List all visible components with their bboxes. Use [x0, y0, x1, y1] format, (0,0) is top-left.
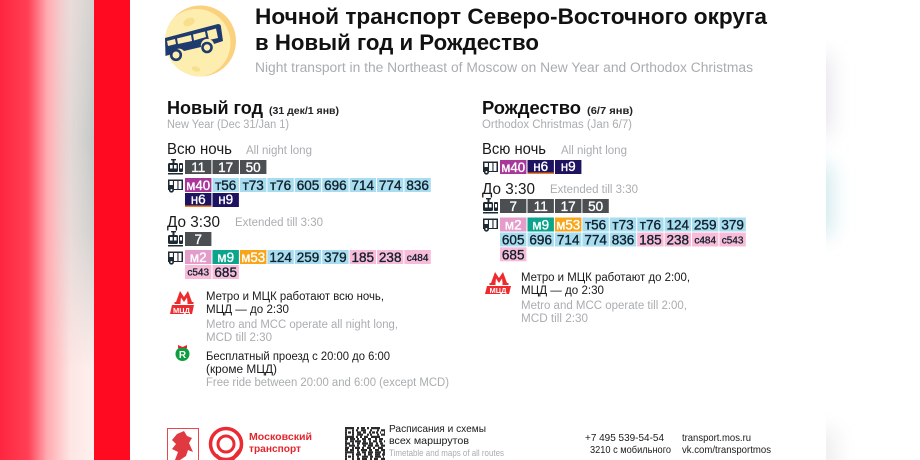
title: [255, 4, 768, 55]
bus routes all night: т76: [270, 178, 291, 193]
heading: till 3:30: До 3:30: [482, 181, 535, 198]
bus routes till 3:30: с543: [722, 236, 744, 246]
heading: all night: [167, 141, 312, 158]
bus routes all night: 696: [324, 178, 347, 193]
heading: all night: Всю ночь: [167, 141, 232, 158]
blurred left background: [0, 0, 94, 460]
heading: till 3:30: [482, 181, 638, 198]
bus routes till 3:30: м53: [241, 250, 265, 265]
bus routes all night: [500, 159, 581, 175]
icon: tram: [483, 198, 498, 214]
blurred right background: [780, 55, 835, 460]
bus routes all night: 774: [379, 178, 402, 193]
footer: Moscow transport name: [249, 431, 312, 455]
tram routes all night: 11: [191, 160, 205, 175]
footer: Moscow transport name: Московский: [249, 431, 312, 443]
tram routes till 3:30: 7: [509, 199, 517, 214]
bus routes till 3:30: 379: [721, 218, 744, 232]
heading: till 3:30: До 3:30: [167, 214, 220, 231]
bus routes till 3:30: т73: [612, 218, 634, 232]
bus routes till 3:30: т76: [640, 218, 661, 232]
bus routes till 3:30: 185: [352, 250, 374, 265]
bus routes till 3:30: 124: [667, 218, 690, 232]
bus routes all night: 605: [297, 178, 319, 193]
note: metro hours: [521, 272, 690, 325]
heading: all night: All night long: [246, 145, 312, 157]
note: metro hours: МЦД — до 2:30: [521, 285, 604, 297]
bus routes till 3:30: 685: [214, 265, 237, 280]
subtitle: Night transport in the Northeast of Moscow on New Year and Orthodox Christmas: [255, 60, 753, 75]
panel: New Year: [167, 97, 449, 389]
icon: tram: [168, 231, 183, 246]
note: free ride: Бесплатный проезд с 20:00 до 6:00: [206, 351, 390, 363]
footer: QR code: [345, 427, 385, 460]
note: metro hours: MCD till 2:30: [206, 332, 272, 344]
note: metro hours: MCD till 2:30: [521, 313, 588, 325]
icon: bus: [483, 218, 498, 232]
bus routes till 3:30: 238: [379, 250, 401, 265]
heading: Christmas: Рождество: [482, 97, 581, 118]
bus routes all night: м40: [186, 178, 210, 193]
heading: New Year: [167, 97, 339, 131]
footer: Moscow transport logo: [210, 428, 242, 460]
note: metro hours: Метро и МЦК работают до 2:00,: [521, 272, 690, 284]
bus routes till 3:30: м2: [190, 250, 207, 265]
icon: metro: [170, 291, 194, 315]
heading: New Year: New Year (Dec 31/Jan 1): [167, 119, 289, 131]
tram route till 3:30: [185, 232, 211, 247]
bus routes till 3:30: 714: [557, 232, 580, 248]
tram routes till 3:30: [500, 199, 609, 214]
footer: timetable note: Расписания и схемы: [389, 423, 486, 435]
tram routes till 3:30: 17: [561, 199, 576, 214]
bus routes till 3:30: м9: [217, 250, 234, 265]
heading: all night: [482, 141, 627, 158]
bus routes till 3:30: 685: [502, 247, 524, 262]
bus routes all night: 836: [406, 178, 429, 193]
bus routes till 3:30: с543: [187, 268, 209, 278]
heading: till 3:30: Extended till 3:30: [550, 184, 638, 196]
icon: metro: МЦД: [489, 286, 507, 295]
note: metro hours: МЦД — до 2:30: [206, 304, 289, 316]
heading: New Year: (31 дек/1 янв): [269, 105, 339, 117]
footer: phones: +7 495 539-54-54: [585, 432, 664, 444]
red stripe: [94, 0, 130, 460]
bus routes all night: [185, 178, 431, 207]
bus routes till 3:30: [500, 218, 746, 262]
icon: tram: [168, 159, 183, 174]
bus routes till 3:30: с484: [694, 236, 716, 246]
note: free ride: (кроме МЦД): [206, 364, 277, 376]
footer: links: [682, 432, 771, 456]
icon: free ride ornament: [176, 345, 190, 361]
bus routes all night: 714: [352, 178, 375, 193]
tram routes till 3:30: 50: [588, 199, 603, 214]
footer: phones: [585, 432, 671, 456]
bus routes all night: н6: [533, 159, 548, 174]
note: metro hours: [206, 291, 398, 344]
icon: metro: [485, 272, 511, 295]
heading: till 3:30: [167, 214, 323, 231]
heading: Christmas: Orthodox Christmas (Jan 6/7): [482, 119, 632, 131]
bus routes till 3:30: 238: [667, 232, 689, 248]
bus routes till 3:30: 185: [639, 232, 662, 248]
icon: bus: [483, 162, 498, 175]
bus routes till 3:30: 774: [584, 232, 607, 248]
tram routes all night: 17: [218, 160, 233, 175]
note: free ride: [206, 351, 449, 389]
bus routes till 3:30: 379: [324, 250, 347, 265]
panel: Christmas: [482, 97, 746, 325]
bus routes till 3:30: 836: [612, 232, 634, 248]
footer: Moscow transport name: транспорт: [249, 443, 301, 455]
title: в Новый год и Рождество: [255, 30, 539, 55]
bus routes till 3:30: 259: [297, 250, 319, 265]
bus routes all night: т56: [215, 178, 236, 193]
bus routes till 3:30: 696: [529, 232, 552, 248]
note: metro hours: Metro and MCC operate all night long,: [206, 319, 398, 331]
title: Ночной транспорт Северо-Восточного округа: [255, 4, 768, 29]
footer: timetable note: Timetable and maps of all routes: [389, 448, 504, 459]
bus routes till 3:30: 124: [269, 250, 292, 265]
heading: all night: All night long: [561, 145, 627, 157]
icon: metro: МЦД: [173, 306, 191, 315]
tram route till 3:30: 7: [194, 232, 202, 247]
icon: bus on moon: [162, 6, 236, 77]
heading: Christmas: [482, 97, 633, 131]
white page panel: [130, 0, 826, 460]
bus routes all night: н9: [218, 192, 233, 207]
icon: free ride ornament: R: [179, 350, 187, 361]
tram routes all night: 50: [246, 160, 261, 175]
icon: bus: [168, 180, 183, 193]
tram routes all night: [185, 160, 266, 175]
footer: links: transport.mos.ru: [682, 432, 751, 444]
bus routes till 3:30: с484: [407, 253, 429, 264]
icon: bus: [168, 252, 183, 265]
bus routes all night: т73: [243, 178, 264, 193]
bus routes till 3:30: т56: [585, 218, 606, 232]
heading: New Year: Новый год: [167, 97, 263, 118]
heading: till 3:30: Extended till 3:30: [235, 217, 323, 229]
footer: timetable note: всех маршрутов: [389, 435, 469, 447]
heading: all night: Всю ночь: [482, 141, 546, 158]
note: metro hours: Metro and MCC operate till 2:00,: [521, 300, 687, 312]
note: metro hours: Метро и МЦК работают всю ночь,: [206, 291, 384, 303]
bus routes till 3:30: м9: [532, 218, 549, 232]
bus routes till 3:30: 259: [694, 218, 716, 232]
footer: timetable note: [389, 423, 504, 459]
bus routes all night: м40: [501, 160, 525, 175]
footer: links: vk.com/transportmos: [682, 444, 771, 456]
bus routes all night: н9: [561, 159, 576, 174]
footer: Moscow coat of arms: [168, 428, 198, 460]
bus routes till 3:30: м2: [505, 218, 522, 232]
bus routes till 3:30: [185, 250, 431, 280]
footer: phones: 3210 с мобильного: [590, 444, 671, 456]
note: free ride: Free ride between 20:00 and 6:00 (except MCD): [206, 377, 449, 389]
heading: Christmas: (6/7 янв): [587, 105, 633, 117]
bus routes till 3:30: 605: [502, 232, 524, 248]
bus routes till 3:30: м53: [556, 218, 580, 232]
bus routes all night: н6: [191, 192, 206, 207]
tram routes till 3:30: 11: [534, 199, 548, 214]
